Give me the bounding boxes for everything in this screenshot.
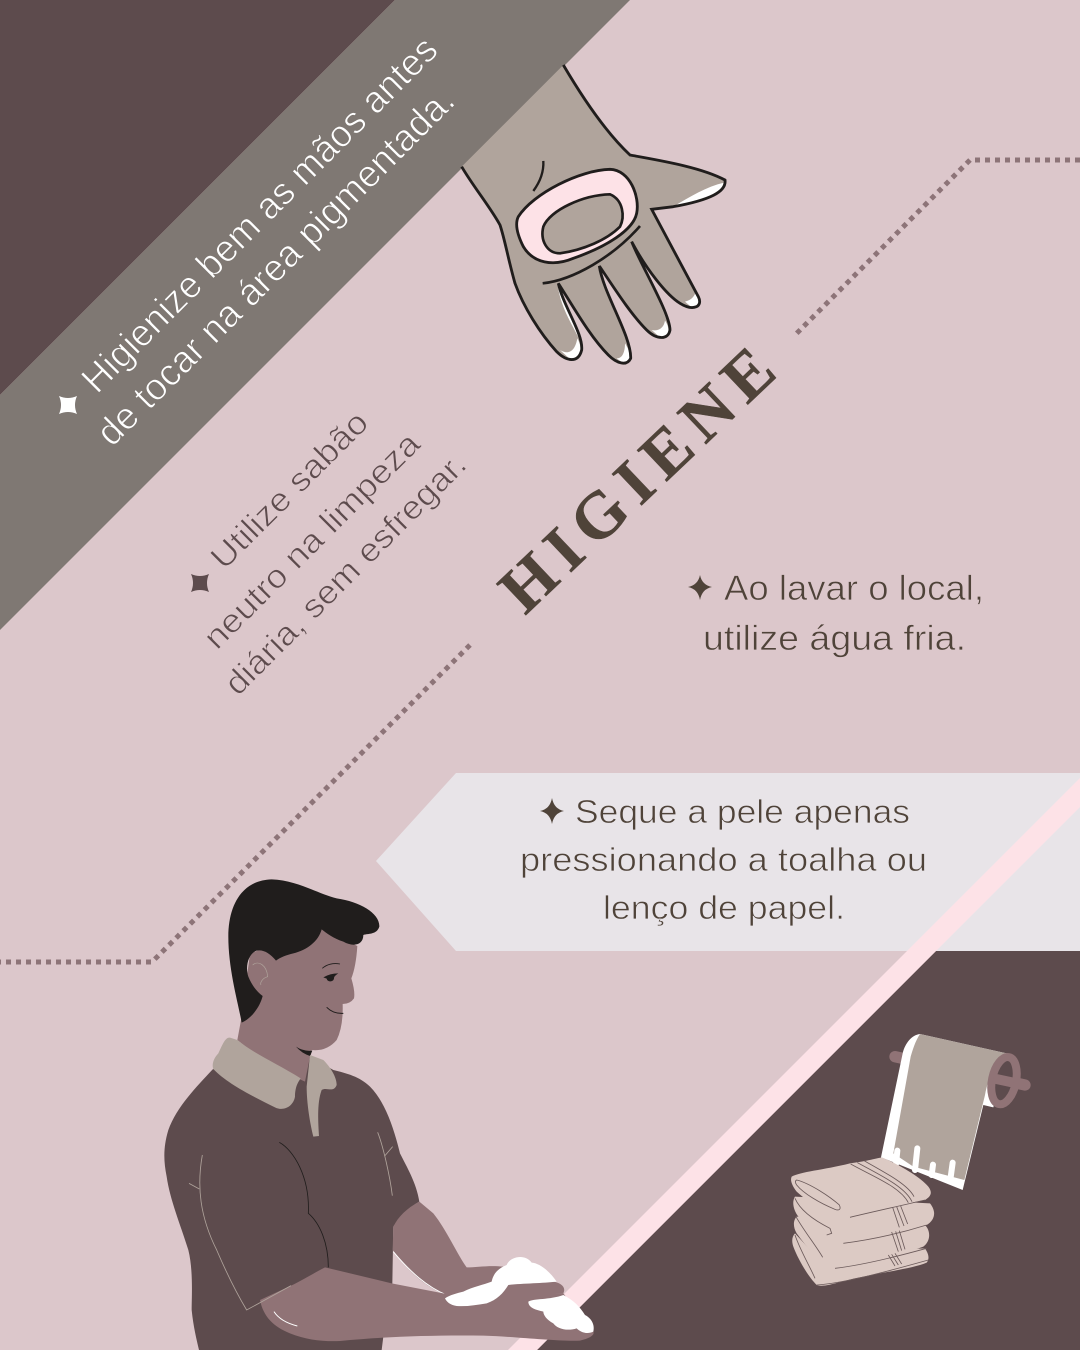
soap bar: [517, 169, 637, 263]
upper soap foam: [445, 1257, 557, 1306]
shirt: [164, 1057, 419, 1350]
bottom towel: [792, 1233, 928, 1286]
back forearm: [393, 1202, 564, 1295]
paper white backing: [881, 1034, 1007, 1190]
text: neutral soap tip: [191, 403, 473, 702]
line two: neutro na limpeza: [196, 424, 428, 656]
soap centre: [542, 194, 623, 253]
eye: [323, 973, 338, 981]
top towel: [791, 1157, 931, 1217]
rod centre: [993, 1078, 1013, 1083]
line one: Utilize sabão: [203, 403, 375, 576]
right sleeve seam: [378, 1132, 393, 1196]
panel: lavender callout shape: [376, 773, 1080, 951]
elbow highlight: [274, 1312, 297, 1326]
hand outline: [462, 65, 725, 363]
pink diagonal stripe: [508, 778, 1080, 1350]
neck shadow: [296, 1047, 312, 1056]
line one: Ao lavar o local,: [724, 569, 984, 608]
back forearm highlight: [393, 1252, 447, 1295]
towel fold lines: [795, 1180, 928, 1285]
text: drying tip: [520, 793, 927, 926]
line three: lenço de papel.: [603, 889, 845, 926]
text: cold water tip: [688, 569, 984, 658]
icon: star: [688, 575, 712, 600]
line one: Higienize bem as mãos antes: [74, 29, 446, 401]
dark lower right panel: [537, 951, 1080, 1350]
left collar: [213, 1038, 301, 1109]
towel stack: [791, 1157, 934, 1286]
left sleeve seam: [189, 1155, 291, 1310]
head and neck: [237, 928, 357, 1083]
ear line: [253, 963, 268, 985]
lower soap foam: [528, 1295, 594, 1333]
thumb crease: [533, 161, 543, 191]
line two: de tocar na área pigmentada.: [89, 80, 463, 454]
lower dotted line: [0, 645, 470, 962]
icon: hand holding soap: [462, 65, 725, 363]
title: HIGIENE: [485, 333, 789, 627]
holder ring: [987, 1055, 1021, 1107]
paper sheet: [893, 1034, 1007, 1180]
smile: [327, 1007, 343, 1013]
illustration: toilet paper and towels: [791, 1034, 1025, 1286]
palm crease: [543, 226, 640, 283]
holder rod: [895, 1057, 1025, 1085]
icon: star: [540, 798, 564, 824]
icon: star: [191, 574, 209, 592]
right collar: [307, 1055, 337, 1137]
upper dotted line: [796, 160, 1080, 334]
dark corner triangle: [0, 0, 395, 395]
hand fill: [462, 65, 725, 363]
eyebrow: [322, 964, 340, 968]
icon: star: [59, 396, 77, 414]
paper fringe: [896, 1148, 953, 1177]
third towel: [794, 1217, 929, 1268]
line two: utilize água fria.: [703, 619, 966, 658]
second towel: [793, 1197, 934, 1243]
front forearm: [260, 1267, 594, 1341]
illustration: man washing hands: [164, 879, 594, 1350]
line three: diária, sem esfregar.: [217, 445, 473, 702]
towel stripes: [851, 1161, 914, 1266]
text: hand washing tip: [59, 29, 463, 454]
nail highlights: [557, 183, 724, 363]
grey diagonal band: [0, 0, 630, 630]
hair: [228, 879, 379, 1023]
shirt fold: [279, 1142, 328, 1267]
line one: Seque a pele apenas: [575, 793, 910, 830]
line two: pressionando a toalha ou: [520, 841, 927, 878]
